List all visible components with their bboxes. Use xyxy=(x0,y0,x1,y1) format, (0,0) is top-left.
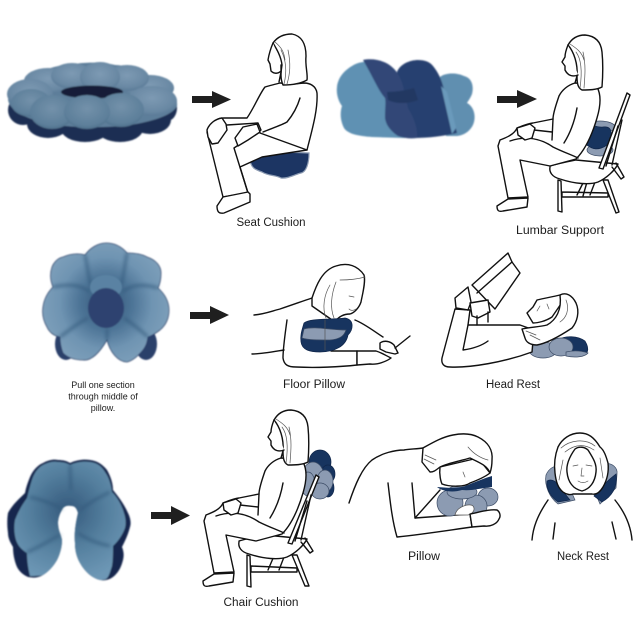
arrow: floor pillow xyxy=(190,306,229,324)
instruction text: Pull one section xyxy=(71,380,135,390)
figure: seat cushion xyxy=(207,34,317,213)
figure: chair cushion xyxy=(203,410,335,587)
head rest cushion xyxy=(529,337,588,358)
figure: lumbar support with chair xyxy=(497,35,630,213)
figure: head rest xyxy=(442,253,588,367)
label: Pillow: Pillow xyxy=(408,551,441,563)
head xyxy=(568,35,603,90)
instruction text xyxy=(68,380,138,413)
desk pillow cushion xyxy=(437,485,498,517)
body xyxy=(498,83,600,198)
label: Neck Rest: Neck Rest xyxy=(557,551,610,563)
figure: floor pillow xyxy=(252,264,410,367)
figure: pillow on desk xyxy=(349,434,500,537)
chair xyxy=(247,555,309,587)
chair xyxy=(558,180,619,213)
instruction text: pillow. xyxy=(91,403,115,413)
label: Lumbar Support: Lumbar Support xyxy=(516,225,605,237)
head pillow behind chair xyxy=(301,450,335,499)
photo: twisted pillow xyxy=(337,59,475,138)
instruction text: through middle of xyxy=(68,392,138,402)
head xyxy=(274,410,309,465)
body xyxy=(204,458,306,573)
label: Head Rest: Head Rest xyxy=(486,379,541,391)
photo: U-shaped neck pillow xyxy=(7,460,131,580)
label: Seat Cushion: Seat Cushion xyxy=(236,217,306,229)
cushion under seat xyxy=(250,152,309,178)
photo: round flower pillow xyxy=(7,62,177,142)
arrow: lumbar support xyxy=(497,90,537,108)
arrow: seat cushion xyxy=(192,91,231,108)
neck cushion xyxy=(546,464,617,504)
figure: neck rest xyxy=(532,433,632,540)
arrow: chair cushion xyxy=(151,506,190,525)
label: Floor Pillow: Floor Pillow xyxy=(283,379,346,391)
floor pillow cushion xyxy=(301,318,352,352)
label: Chair Cushion: Chair Cushion xyxy=(224,597,298,609)
photo: pillow with section pulled through xyxy=(43,243,169,362)
lumbar pillow xyxy=(582,121,615,156)
